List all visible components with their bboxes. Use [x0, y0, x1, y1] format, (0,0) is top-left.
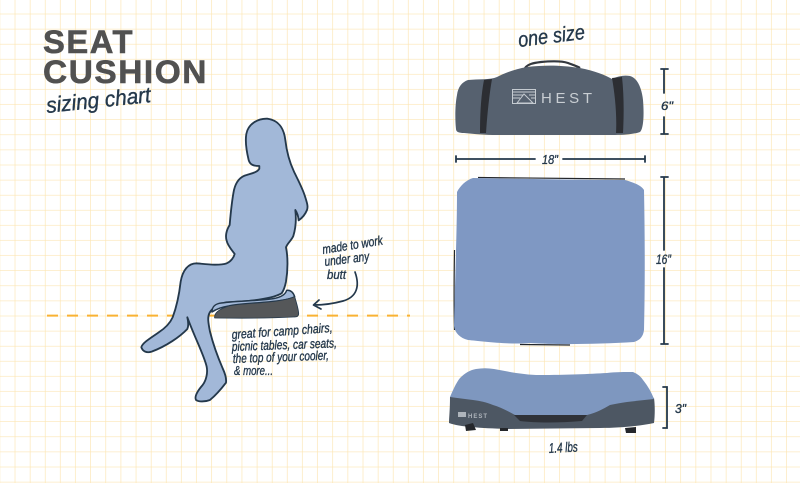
callout: made to work under any butt: made to work [321, 232, 385, 257]
title: CUSHION [43, 54, 208, 90]
subtitle: sizing chart: sizing chart [45, 82, 153, 118]
dimension: height 3 in [663, 387, 687, 428]
strap right [612, 77, 624, 133]
dimension: width 18 in: 18" [542, 152, 559, 167]
logo: HEST: HEST [541, 90, 592, 107]
handle [514, 415, 587, 422]
illustration: seated woman on cushion [141, 119, 308, 401]
callout: made to work under any butt: under any [324, 248, 371, 269]
dimension: height 3 in: 3" [675, 401, 687, 416]
cushion lip [212, 290, 295, 312]
strap left [480, 79, 492, 133]
note: great for: great for camp chairs, [231, 320, 333, 342]
cushion face [454, 178, 645, 344]
dimension: width 18 in [456, 152, 645, 167]
cushion edge [454, 178, 625, 345]
feet [465, 423, 636, 433]
bag handle [525, 61, 580, 68]
logo: small HEST [458, 412, 487, 420]
note: great for [231, 320, 337, 378]
product: rolled cushion bag [455, 61, 644, 135]
dimension: height 6 in: 6" [661, 99, 674, 113]
product: cushion side view [449, 368, 655, 433]
bag body [455, 66, 644, 135]
arrow to cushion [314, 272, 357, 309]
silhouette: woman [141, 119, 308, 401]
dimension: height 6 in [661, 69, 674, 134]
callout: made to work under any butt: butt [327, 267, 347, 282]
base [449, 385, 655, 429]
callout: made to work under any butt [321, 232, 385, 282]
logo: HEST [512, 90, 592, 107]
cushion side [215, 297, 299, 318]
title [43, 24, 208, 90]
note: great for: the top of your cooler, [233, 348, 329, 366]
title: SEAT [43, 24, 134, 60]
product: cushion top view [454, 178, 645, 345]
heading: one size: one size [517, 21, 586, 52]
note: great for: picnic tables, car seats, [231, 335, 337, 354]
weight label: 1.4 lbs [548, 439, 578, 456]
note: great for: & more... [234, 363, 273, 378]
top [450, 368, 654, 415]
dimension: depth 16 in: 16" [656, 251, 672, 267]
logo: small HEST: HEST [468, 414, 487, 420]
ground dashed line [47, 315, 410, 317]
dimension: depth 16 in [656, 177, 672, 344]
